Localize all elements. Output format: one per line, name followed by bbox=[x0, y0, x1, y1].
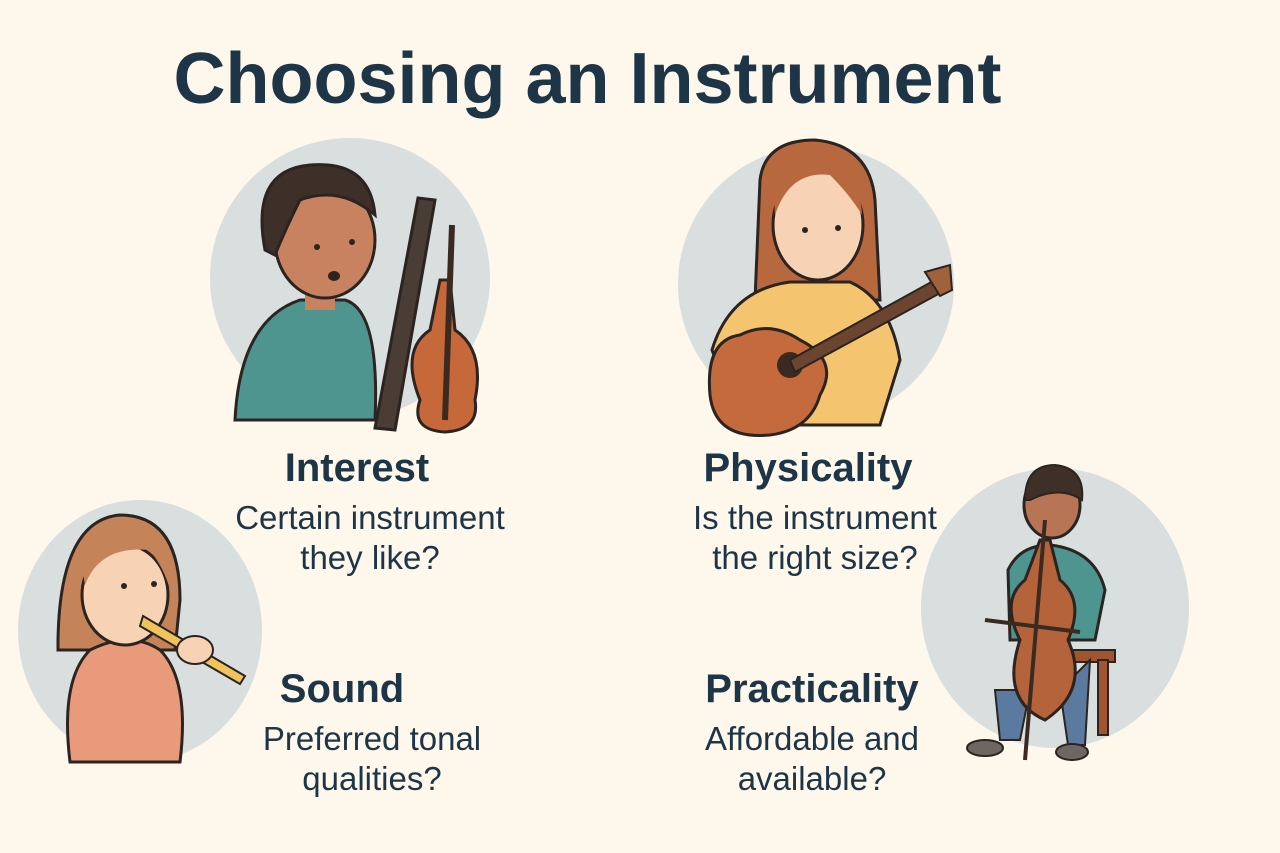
heading: Physicality: Physicality bbox=[703, 446, 912, 490]
text: practicality question: available? bbox=[738, 760, 886, 797]
icon: boy playing cello bbox=[921, 465, 1189, 760]
heading: Practicality: Practicality bbox=[705, 667, 919, 711]
text: physicality question: the right size? bbox=[712, 539, 918, 576]
text: sound question: Preferred tonal bbox=[263, 720, 481, 757]
icon: boy with clarinet and violin bbox=[210, 138, 490, 432]
text: interest question bbox=[235, 499, 505, 576]
icon: girl with flute bbox=[18, 500, 262, 762]
heading: Interest: Interest bbox=[285, 446, 429, 490]
text: sound question: qualities? bbox=[302, 760, 442, 797]
heading: Sound: Sound bbox=[280, 667, 404, 711]
text: practicality question bbox=[705, 720, 919, 797]
text: physicality question bbox=[693, 499, 937, 576]
text: physicality question: Is the instrument bbox=[693, 499, 937, 536]
icon: girl with guitar bbox=[678, 140, 954, 436]
text: practicality question: Affordable and bbox=[705, 720, 919, 757]
text: interest question: Certain instrument bbox=[235, 499, 505, 536]
text: interest question: they like? bbox=[300, 539, 440, 576]
text: sound question bbox=[263, 720, 481, 797]
title: Choosing an Instrument bbox=[174, 39, 1002, 119]
